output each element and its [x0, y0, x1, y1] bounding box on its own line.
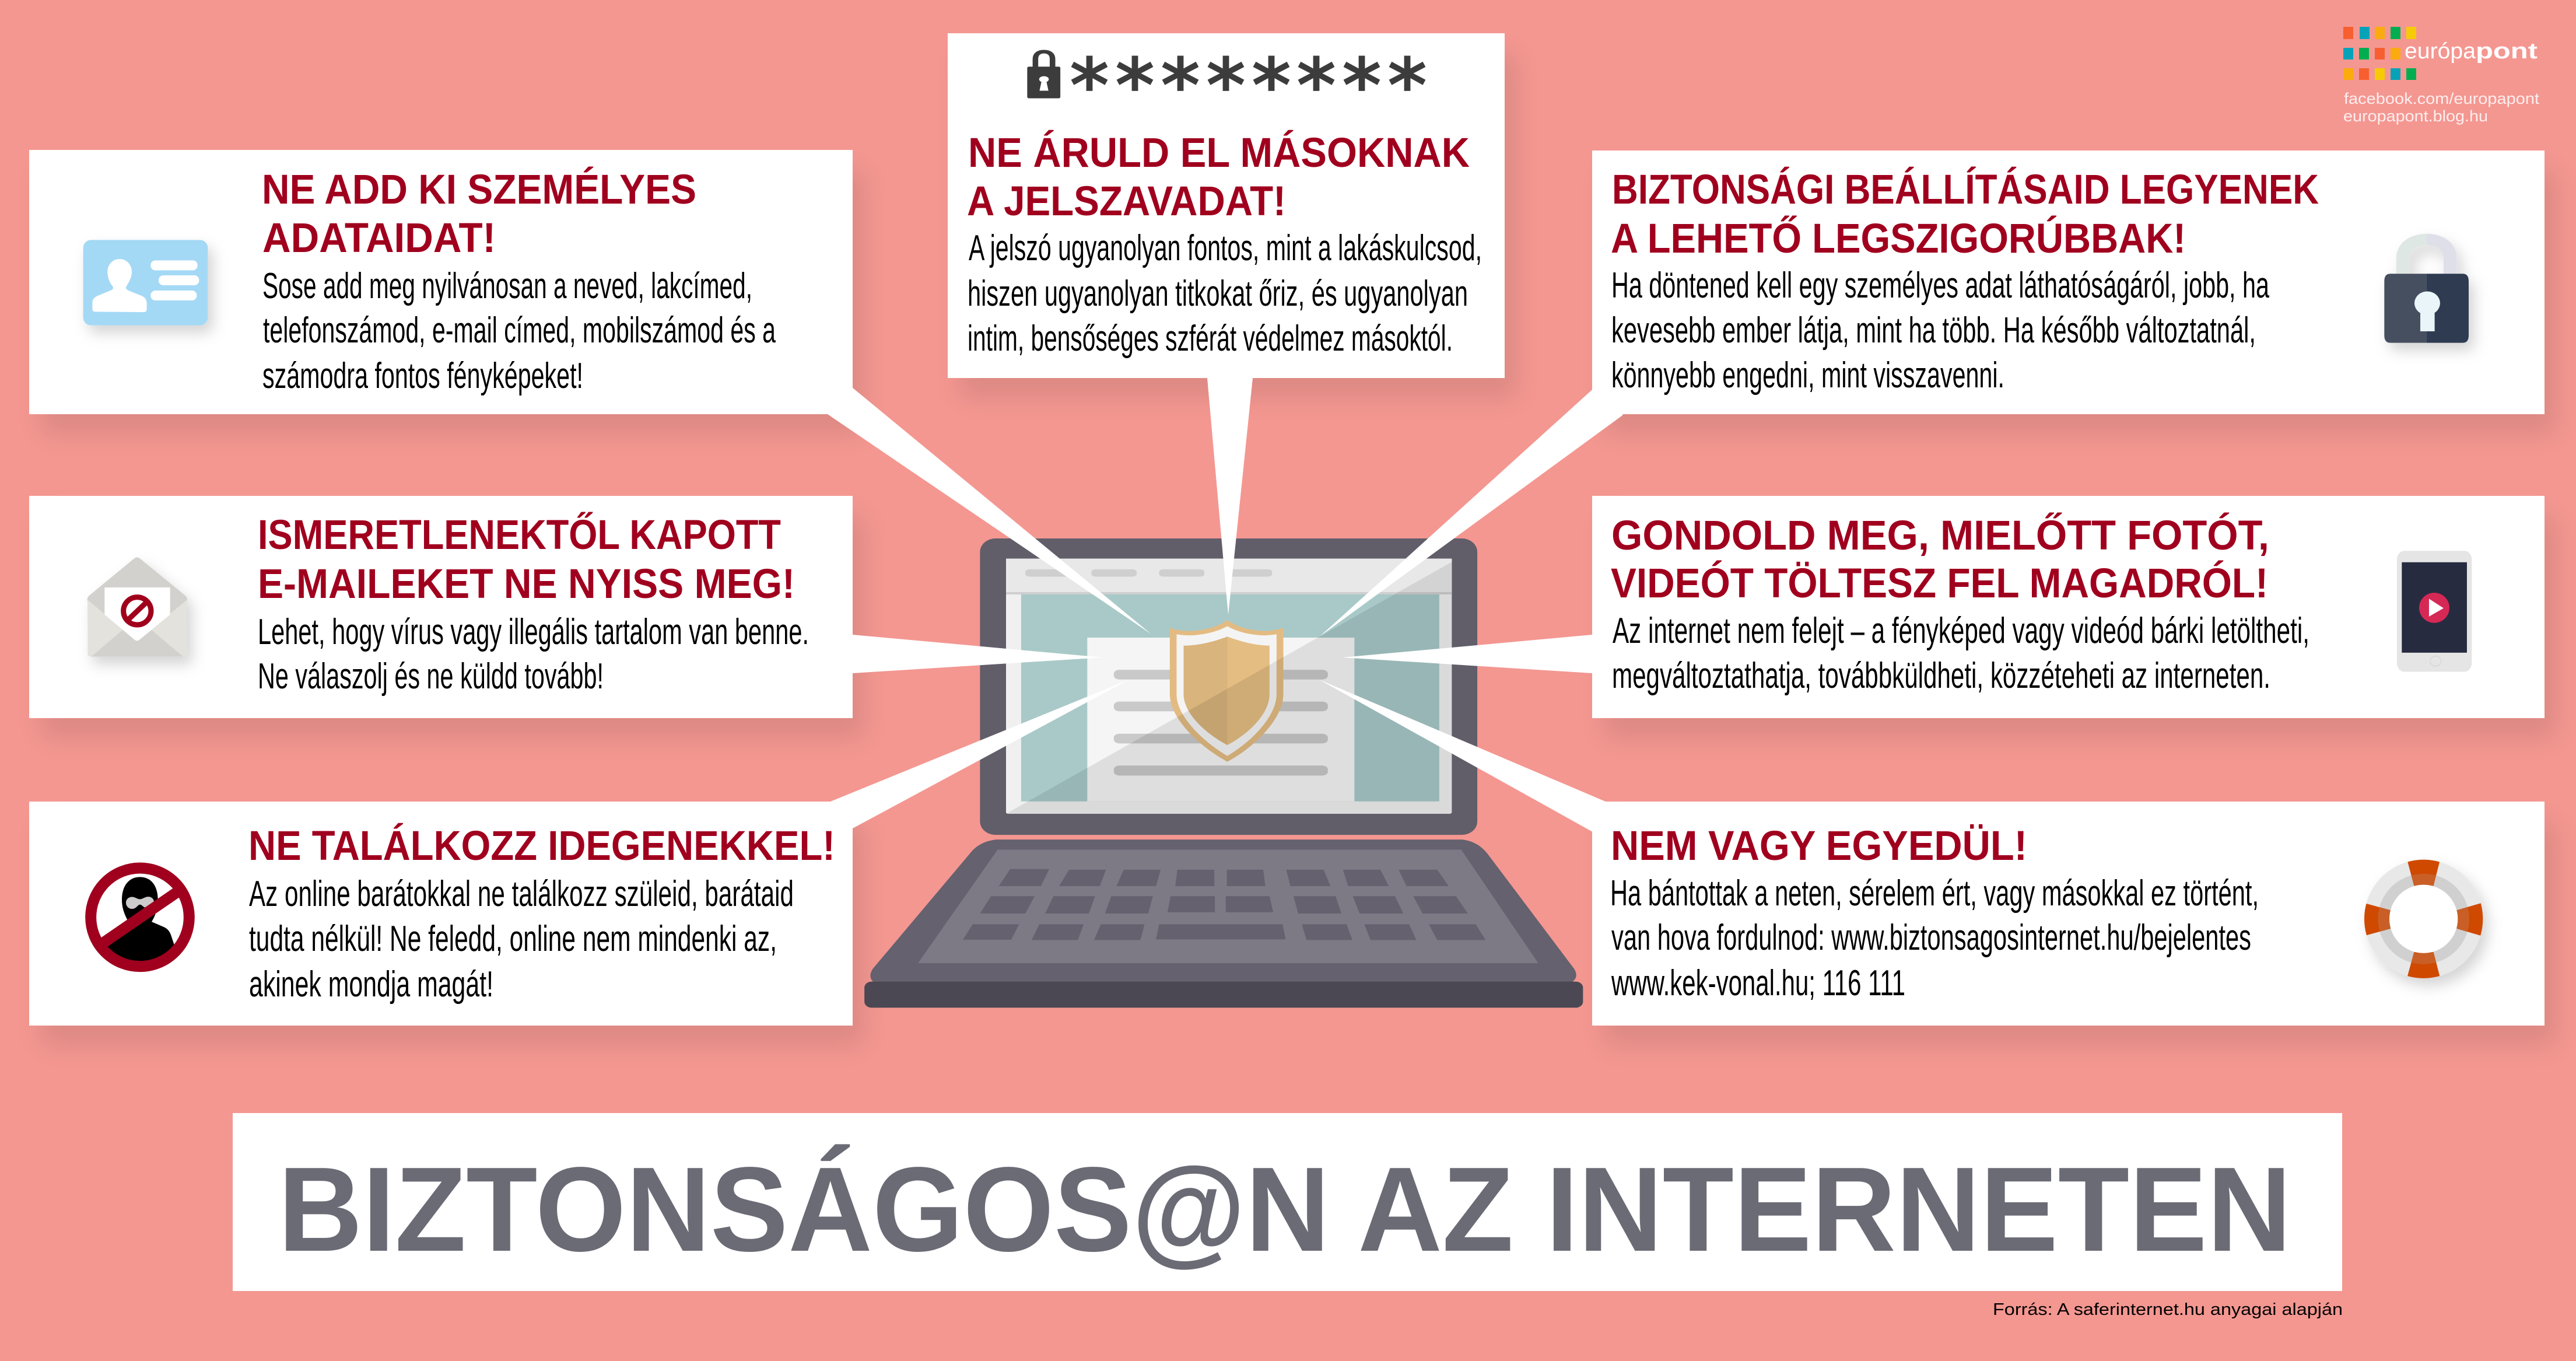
laptop illustration [864, 538, 1583, 1007]
logo wordmark: európa [2405, 39, 2476, 64]
body text: megváltoztathatja, továbbküldheti, közzéteheti az interneten. [1612, 656, 2270, 696]
icon: envelope [87, 557, 187, 657]
title banner [233, 1113, 2342, 1291]
body text [1611, 265, 2269, 396]
heading: ADATAIDAT! [262, 215, 496, 261]
browser window [1006, 559, 1452, 814]
laptop screen bezel [980, 538, 1477, 835]
icon: small padlock [1027, 52, 1060, 99]
body text: intim, bensőséges szférát védelmez másoktól. [968, 319, 1453, 359]
panel: photos and videos [1592, 496, 2545, 718]
body text [968, 228, 1482, 359]
logo wordmark bold: pont [2476, 39, 2538, 64]
body text: van hova fordulnod: www.biztonsagosinternet.hu/bejelentes [1611, 918, 2251, 958]
heading: NEM VAGY EGYEDÜL! [1611, 823, 2027, 869]
body text: hiszen ugyanolyan titkokat őriz, és ugyanolyan [968, 274, 1468, 314]
icon: ID card [83, 240, 208, 326]
heading: NE ÁRULD EL MÁSOKNAK [968, 130, 1470, 176]
heading: E-MAILEKET NE NYISS MEG! [258, 561, 795, 607]
heading: BIZTONSÁGI BEÁLLÍTÁSAID LEGYENEK [1612, 167, 2319, 213]
body text [249, 874, 794, 1005]
panel: strangers [29, 802, 853, 1026]
heading [1611, 513, 2269, 607]
body text: Ha döntened kell egy személyes adat láthatóságáról, jobb, ha [1611, 265, 2269, 306]
body text [1612, 611, 2309, 696]
body text [1610, 873, 2259, 1003]
main title: BIZTONSÁGOS@N AZ INTERNETEN [278, 1142, 2291, 1276]
heading: NE TALÁLKOZZ IDEGENEKKEL! [248, 823, 835, 869]
panel: password [948, 33, 1505, 378]
body text: Ha bántottak a neten, sérelem ért, vagy másokkal ez történt, [1610, 873, 2259, 914]
panel: unknown e-mails [29, 496, 853, 718]
panel: you are not alone [1592, 802, 2545, 1026]
heading: GONDOLD MEG, MIELŐTT FOTÓT, [1611, 513, 2269, 559]
icon: prohibited masked stranger [91, 868, 189, 968]
heading: ISMERETLENEKTŐL KAPOTT [258, 512, 781, 558]
icon: lifebuoy [2360, 856, 2486, 981]
logo colour squares [2343, 27, 2416, 80]
body text [258, 612, 809, 697]
body text: akinek mondja magát! [249, 964, 493, 1005]
source note: Forrás: A saferinternet.hu anyagai alapján [1993, 1300, 2343, 1319]
logo: europapont [2343, 27, 2540, 125]
shield icon [1173, 623, 1280, 759]
panel: personal data [29, 150, 853, 414]
body text: telefonszámod, e-mail címed, mobilszámod és a [263, 310, 776, 351]
keyboard base [864, 839, 1583, 1007]
callout pointer rays [828, 373, 1627, 834]
body text: kevesebb ember látja, mint ha több. Ha később változtatnál, [1611, 310, 2256, 351]
body text: Ne válaszolj és ne küldd tovább! [258, 656, 604, 697]
masked password asterisks: ******** [1070, 41, 1427, 130]
heading [262, 167, 696, 261]
body text: tudta nélkül! Ne feledd, online nem mindenki az, [249, 919, 777, 959]
heading: A JELSZAVADAT! [967, 179, 1286, 225]
heading [258, 512, 795, 607]
body text: Az online barátokkal ne találkozz szüleid, barátaid [249, 874, 794, 914]
body text: A jelszó ugyanolyan fontos, mint a lakáskulcsod, [969, 228, 1482, 268]
heading: VIDEÓT TÖLTESZ FEL MAGADRÓL! [1611, 561, 2268, 607]
blog address: europapont.blog.hu [2343, 107, 2488, 125]
icon: phone with video [2397, 551, 2472, 672]
panel: security settings [1592, 151, 2545, 414]
icon: padlock [2384, 234, 2469, 343]
heading [1611, 167, 2319, 262]
body text: Lehet, hogy vírus vagy illegális tartalom van benne. [258, 612, 809, 652]
body text: www.kek-vonal.hu; 116 111 [1611, 963, 1905, 1003]
body text: Sose add meg nyilvánosan a neved, lakcímed, [262, 266, 752, 306]
body text: számodra fontos fényképeket! [262, 356, 583, 396]
heading: A LEHETŐ LEGSZIGORÚBBAK! [1611, 216, 2186, 262]
body text [262, 266, 776, 396]
facebook address: facebook.com/europapont [2344, 90, 2540, 107]
heading: NE ADD KI SZEMÉLYES [262, 167, 696, 213]
body text: könnyebb engedni, mint visszavenni. [1611, 355, 2004, 396]
heading [967, 130, 1470, 225]
